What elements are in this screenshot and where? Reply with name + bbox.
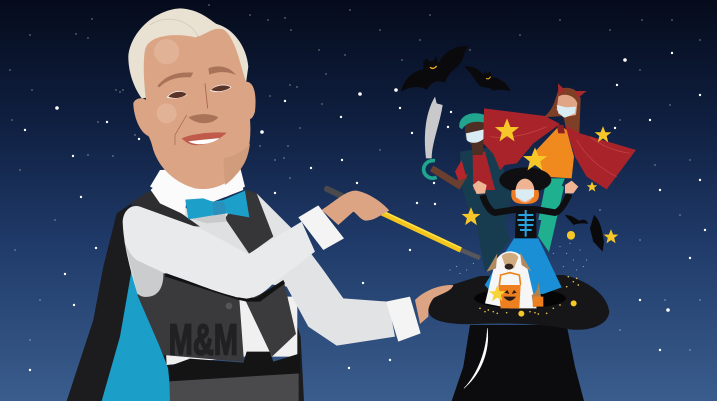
bats, top	[401, 46, 511, 92]
witch skirt	[485, 238, 562, 294]
M&M text: M&M	[169, 316, 238, 365]
waistcoat with M&M monogram	[130, 189, 296, 365]
shirt cuff, holding hand	[386, 297, 421, 342]
witch upper body	[473, 167, 578, 238]
glitter	[518, 232, 577, 317]
wand	[327, 189, 480, 258]
teal legs	[538, 178, 564, 252]
hat brim	[428, 275, 609, 330]
sword	[425, 97, 443, 158]
pirate legs	[470, 190, 510, 272]
near arm	[123, 206, 315, 299]
stars	[462, 118, 618, 243]
top hat	[428, 232, 609, 401]
collar and bow tie	[151, 180, 249, 223]
far arm and shirt	[167, 193, 395, 346]
holding hand	[415, 285, 453, 324]
trousers and belt	[163, 297, 300, 401]
hat crown	[452, 325, 584, 401]
head and hair	[128, 8, 256, 200]
magician	[67, 8, 480, 401]
cape, magician	[67, 203, 304, 401]
bats, small near hat	[565, 215, 604, 252]
bat small	[464, 66, 511, 91]
pirate	[424, 97, 512, 220]
pointing hand and cuff	[298, 191, 389, 250]
costumed characters	[424, 83, 636, 272]
dog in ghost sheet with pumpkin bucket	[485, 251, 543, 308]
bat large	[401, 46, 469, 92]
devil: cape and costume	[483, 83, 636, 220]
